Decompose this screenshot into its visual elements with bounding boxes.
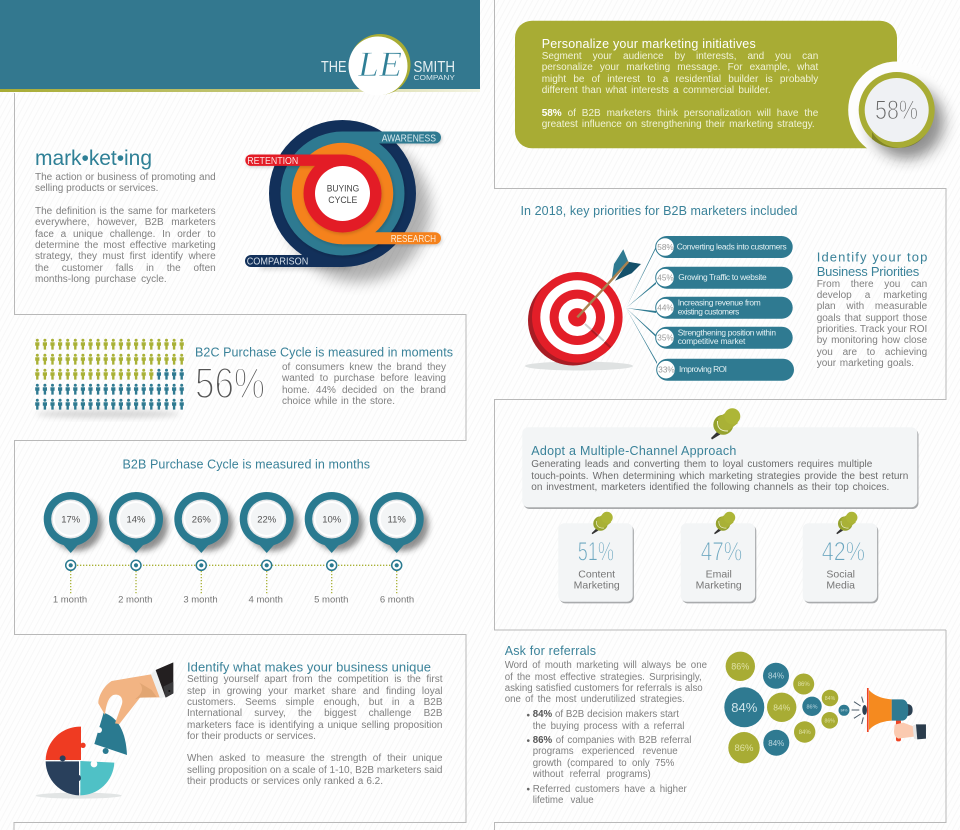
- chart: percentage bubbles: 84%: [768, 739, 784, 748]
- chart: percentage bubbles: 86%: [734, 743, 754, 754]
- heading: priorities: In 2018, key priorities for B2B marketers included: [520, 204, 798, 218]
- text: unique body: International survey, the biggest challenge B2B: [187, 708, 442, 719]
- text: personalize body: greatest influence on strengthening their marketing strategy.: [542, 119, 815, 130]
- text: unique body: selling proposition on a scale of 1-10, B2B marketers said: [187, 765, 442, 776]
- text: priorities body: [817, 279, 937, 374]
- card: social media: [803, 512, 878, 603]
- text: definition: selling products or services.: [35, 183, 158, 194]
- icon: puzzle and hand: [36, 662, 173, 799]
- pin: 5 month: [305, 492, 364, 606]
- list: referral bullets: lifetime value: [533, 795, 594, 806]
- pin: 5 month: 5 month: [314, 595, 348, 606]
- pin: 2 month: [109, 492, 168, 606]
- bar: 44% increasing revenue: [656, 297, 793, 319]
- text: personalize body: different than what interests a commercial builder.: [542, 85, 771, 96]
- text: definition: determine the most effective marketing: [35, 240, 216, 251]
- panel: marketing definition: [14, 93, 466, 314]
- text: priorities body: by monitoring how close: [817, 335, 927, 346]
- text: unique body: [187, 674, 452, 792]
- text: priorities body: From there you can: [817, 279, 927, 290]
- text: priorities body: priorities. Track your ROI: [817, 324, 927, 335]
- text: channel body: touch-points. When determining which marketing strategies provide the best return: [531, 471, 908, 482]
- pin: 2 month: 2 month: [118, 595, 152, 606]
- list: referral bullets: [526, 709, 703, 810]
- text: priorities body: goals that support those: [817, 313, 927, 324]
- chart: connector wedges: [626, 247, 657, 364]
- card: content marketing: Marketing: [574, 580, 620, 592]
- pin: 6 month: 6 month: [380, 595, 414, 606]
- bar: 58% converting leads: [656, 236, 793, 258]
- chart: percentage bubbles: 84%: [731, 700, 758, 715]
- bar: 44% increasing revenue: Increasing revenue from: [678, 298, 761, 308]
- text: B2C explanation: [282, 362, 457, 410]
- pin: 1 month: 17%: [61, 514, 81, 526]
- bar: 35% strengthening position: 35%: [657, 334, 674, 343]
- list: referral bullets: •: [526, 785, 530, 796]
- list: referral bullets: 86% of companies with B2B referral: [533, 735, 691, 746]
- pin: 3 month: 3 month: [183, 595, 218, 606]
- text: B2C explanation: home. 44% decided on the brand: [282, 385, 446, 396]
- chart: percentage bubbles: 84%: [768, 672, 784, 681]
- heading: channel: Adopt a Multiple-Channel Approach: [531, 444, 736, 458]
- text: unique body: their products or services only ranked a 6.2.: [187, 776, 383, 787]
- heading: unique: Identify what makes your business unique: [187, 660, 431, 675]
- list: referral bullets: •: [526, 710, 530, 721]
- text: unique body: for their products or services.: [187, 731, 316, 742]
- text: channel body: [531, 459, 916, 495]
- text: personalize body: [542, 51, 832, 136]
- chart: percentage bubbles: 84%: [841, 708, 847, 712]
- chart: buying cycle rings: [245, 120, 441, 282]
- panel: personalize: [494, 0, 946, 188]
- text: definition: the customer falls in the often: [35, 263, 216, 274]
- heading: B2B: B2B Purchase Cycle is measured in months: [122, 458, 370, 472]
- card: email marketing: 47%: [701, 537, 742, 567]
- card: social media: 42%: [822, 537, 865, 567]
- text: referrals intro: of the most effective strategies. Surprisingly,: [505, 672, 702, 683]
- pin: 2 month: 14%: [126, 514, 146, 526]
- pin: 4 month: 4 month: [249, 595, 283, 606]
- text: personalize body: Segment your audience by interests, and you can: [542, 51, 818, 62]
- text: referrals intro: one of the most underutilized strategies.: [505, 694, 685, 705]
- pin: 3 month: [174, 492, 233, 606]
- chart: percentage bubbles: 84%: [799, 730, 811, 736]
- bar: 33% improving ROI: Improving ROI: [679, 364, 727, 374]
- logo: LE: [357, 44, 402, 84]
- bar: 35% strengthening position: Strengthening position within: [678, 328, 776, 338]
- heading: marketing: mark•ket•ing: [35, 147, 152, 170]
- heading: top business priorities: [817, 250, 927, 279]
- text: unique body: Setting yourself apart from the competition is the first: [187, 674, 442, 685]
- pin: 3 month: 26%: [192, 514, 211, 526]
- pin: 1 month: [44, 492, 103, 606]
- heading: personalize: Personalize your marketing initiatives: [542, 37, 756, 51]
- bar: 58% converting leads: Converting leads into customers: [677, 242, 787, 252]
- chart: buying cycle rings: RETENTION: [247, 156, 298, 167]
- pin: 4 month: [240, 492, 299, 606]
- list: referral bullets: growth (compared to only 75%: [533, 758, 674, 769]
- text: referrals intro: Word of mouth marketing will always be one: [505, 660, 707, 671]
- heading: B2C: B2C Purchase Cycle is measured in moments: [195, 346, 453, 360]
- chart: 100 people pictogram, 56 highlighted: [35, 339, 184, 418]
- chart: buying cycle rings: RESEARCH: [391, 234, 436, 245]
- callout: channel approach: [522, 408, 918, 509]
- chart: percentage bubbles: 84%: [773, 702, 791, 712]
- heading: referrals: Ask for referrals: [505, 644, 596, 658]
- text: priorities body: your marketing goals.: [817, 358, 914, 369]
- text: priorities body: you are to achieving: [817, 347, 927, 358]
- card: email marketing: Marketing: [696, 580, 742, 592]
- bar: 33% improving ROI: [656, 359, 794, 381]
- chart: buying cycle rings: AWARENESS: [382, 133, 436, 144]
- text: definition: The action or business of promoting and: [35, 172, 216, 183]
- text: definition: The definition is the same for marketers: [35, 206, 216, 217]
- text: B2C explanation: of consumers knew the brand they: [282, 362, 446, 373]
- text: definition: face a unique challenge. In order to: [35, 229, 216, 240]
- timeline chart: [44, 492, 429, 606]
- pin: 4 month: 22%: [257, 514, 277, 526]
- stat badge: 58%: [848, 62, 945, 159]
- logo: THE: [321, 59, 346, 76]
- callout: olive box: [515, 21, 897, 148]
- text: priorities body: plan with measurable: [817, 301, 927, 312]
- list: referral bullets: the buying process with a referral: [533, 721, 684, 732]
- text: definition: everywhere, however, B2B marketers: [35, 217, 216, 228]
- bar: 45% growing traffic: 45%: [657, 274, 674, 283]
- chart: percentage bubbles: [724, 652, 850, 763]
- chart: percentage bubbles: 86%: [806, 704, 818, 710]
- panel: unique selling proposition: [14, 634, 466, 830]
- header banner: [0, 0, 480, 96]
- text: channel body: Generating leads and converting them to loyal customers requires multiple: [531, 459, 872, 470]
- icon: target with arrow: [525, 249, 641, 370]
- heading: top business priorities: Identify your top: [817, 250, 927, 265]
- bar: 35% strengthening position: competitive market: [678, 336, 746, 346]
- chart: percentage bubbles: 84%: [825, 696, 836, 702]
- pin: 5 month: 10%: [322, 514, 342, 526]
- text: referrals intro: asking satisfied customers for referrals is also: [505, 683, 703, 694]
- text: personalize body: personalize your marketing message. For example, what: [542, 62, 818, 73]
- text: personalize body: 58% of B2B marketers think personalization will have the: [542, 108, 818, 119]
- heading: top business priorities: Business Priorities: [817, 264, 920, 279]
- panel: B2C purchase cycle: [14, 314, 466, 440]
- text: definition: months-long purchase cycle.: [35, 274, 167, 285]
- chart: percentage bubbles: 86%: [731, 662, 749, 672]
- chart: buying cycle rings: COMPARISON: [247, 257, 308, 268]
- bar: 44% increasing revenue: 44%: [657, 304, 674, 313]
- card: social media: Social: [826, 568, 855, 580]
- text: unique body: customers. Seems simple enough, but in a B2B: [187, 697, 442, 708]
- card: content marketing: [558, 512, 634, 603]
- bar: 35% strengthening position: [656, 327, 793, 349]
- text: channel body: on investment, marketers identified the following channels as their top choices.: [531, 482, 889, 493]
- card: social media: Media: [826, 580, 855, 592]
- text: priorities body: develop a marketing: [817, 290, 927, 301]
- text: B2C explanation: wanted to purchase before leaving: [282, 373, 446, 384]
- card: email marketing: [681, 512, 756, 603]
- list: referral bullets: 84% of B2B decision makers start: [533, 709, 679, 720]
- bar: 45% growing traffic: [656, 267, 793, 289]
- chart: buying cycle rings: BUYING: [327, 184, 359, 195]
- bar: 44% increasing revenue: existing customers: [678, 306, 739, 316]
- text: unique body: When asked to measure the strength of their unique: [187, 753, 442, 764]
- stat badge: 58%: 58%: [875, 95, 918, 125]
- pin: 1 month: 1 month: [53, 595, 87, 606]
- chart: percentage bubbles: 86%: [825, 718, 835, 724]
- list: referral bullets: •: [526, 736, 530, 747]
- list: referral bullets: Referred customers have a higher: [533, 784, 687, 795]
- panel: priorities: [494, 188, 946, 400]
- stat: 56%: 56%: [195, 359, 265, 408]
- pin: 6 month: [370, 492, 429, 606]
- logo: [321, 34, 455, 96]
- text: B2C explanation: choice while in the store.: [282, 396, 395, 407]
- card: content marketing: Content: [578, 568, 615, 580]
- bar: 33% improving ROI: 33%: [658, 366, 675, 375]
- logo: COMPANY: [414, 73, 455, 82]
- card: content marketing: 51%: [578, 537, 614, 567]
- chart: buying cycle rings: CYCLE: [328, 195, 357, 206]
- card: email marketing: Email: [706, 568, 732, 580]
- bar: 58% converting leads: 58%: [657, 243, 674, 252]
- pin: 6 month: 11%: [388, 514, 406, 526]
- text: definition: [35, 172, 225, 287]
- icon: megaphone: [852, 688, 926, 741]
- panel: multiple channel: [494, 400, 946, 630]
- text: unique body: marketers face is identifying a unique selling proposition: [187, 720, 442, 730]
- text: referrals intro: [505, 660, 720, 708]
- list: referral bullets: without referral programs): [533, 769, 651, 780]
- logo: SMITH: [414, 59, 455, 76]
- panel: B2B purchase cycle: [14, 440, 466, 634]
- text: unique body: step in growing your market share and finding loyal: [187, 686, 442, 697]
- text: personalize body: might be of interest to a residential builder is probably: [542, 74, 818, 85]
- text: definition: strategy, they must first identify where: [35, 251, 216, 262]
- panel: referrals: [494, 630, 946, 830]
- icon: push pin: [711, 408, 740, 440]
- list: referral bullets: programs experienced revenue: [533, 746, 678, 757]
- bar: 45% growing traffic: Growing Traffic to website: [678, 272, 767, 282]
- chart: percentage bubbles: 86%: [798, 682, 810, 688]
